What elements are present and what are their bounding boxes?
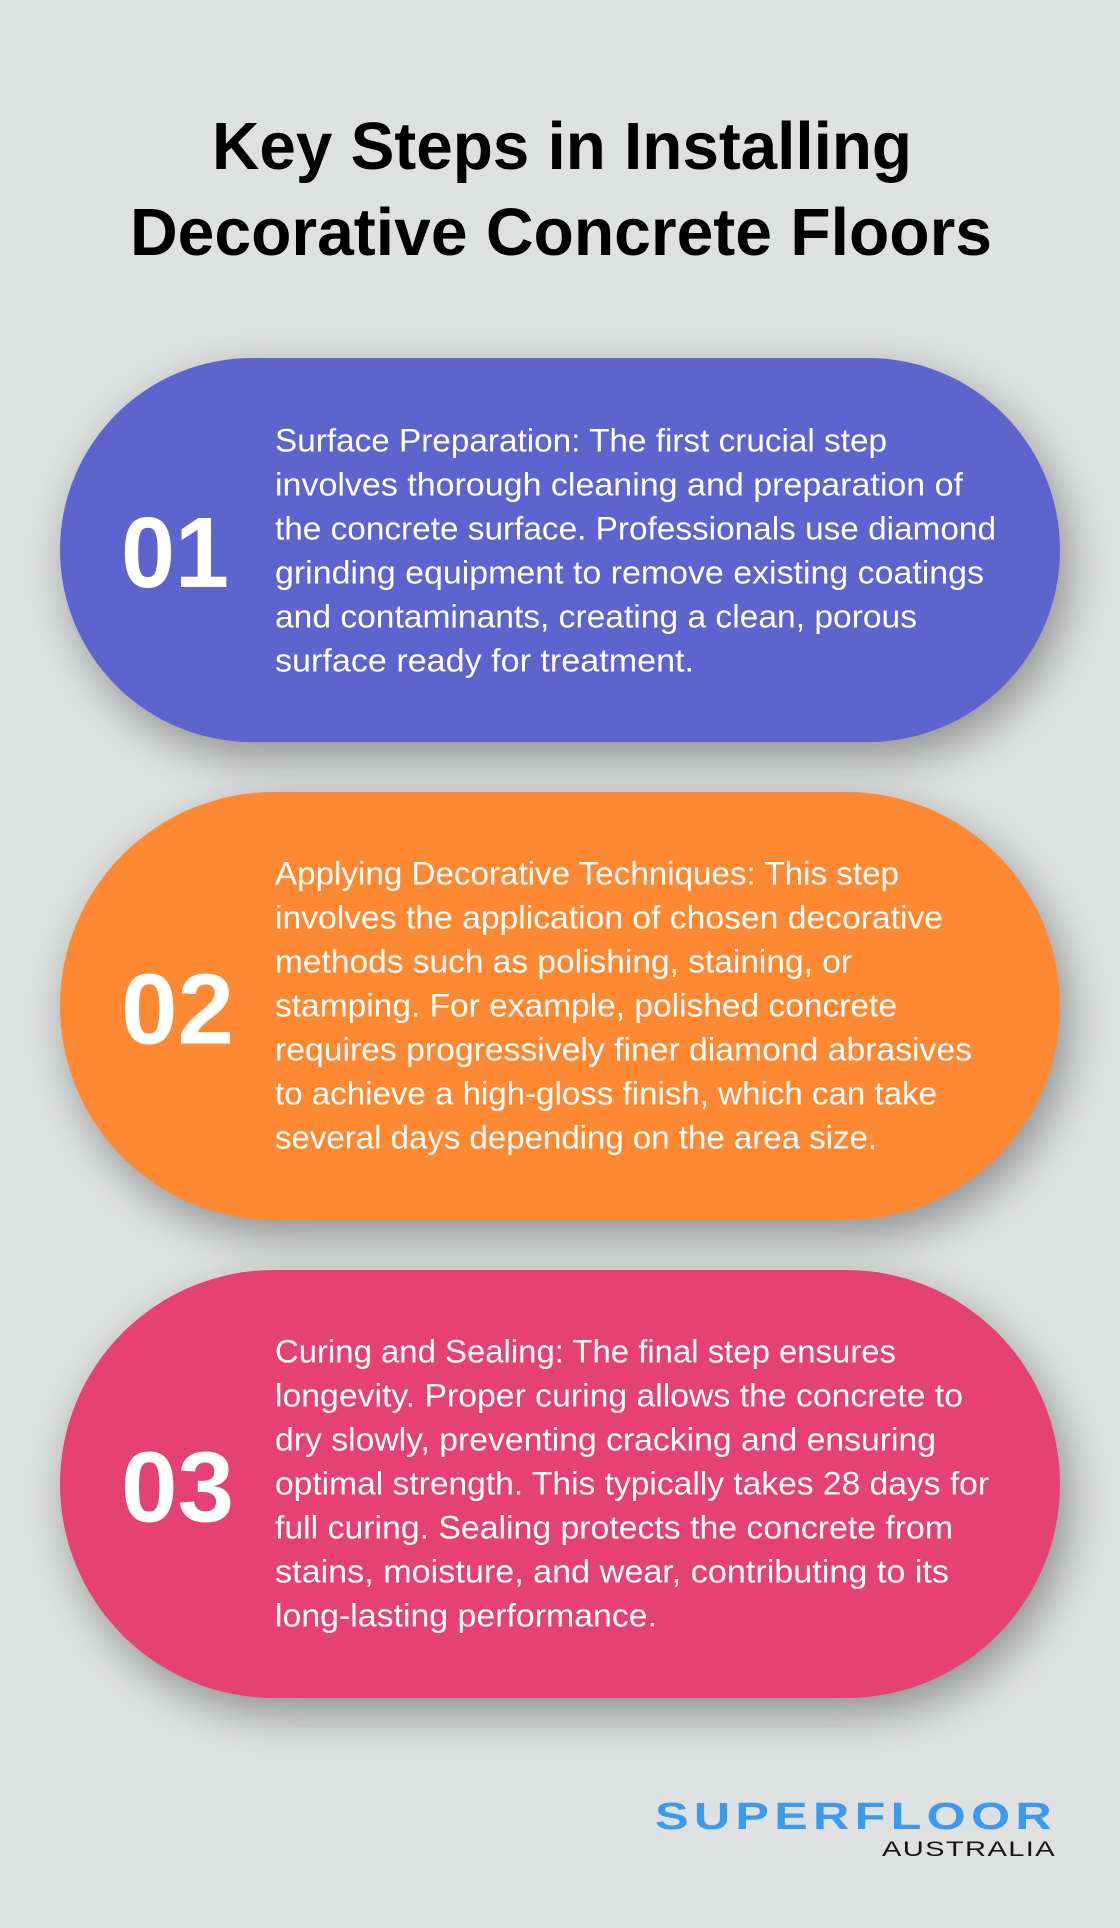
step 01 description: Surface Preparation: The first crucial step [275,422,887,458]
step 01 description: and contaminants, creating a clean, porous [275,598,917,634]
step 02 description: methods such as polishing, staining, or [275,944,852,980]
pill background purple [60,358,1060,742]
step 02 description: Applying Decorative Techniques: This step [275,856,899,892]
logo: Superfloor Australia [655,1796,1057,1861]
step 03 description: stains, moisture, and wear, contributing to its [275,1554,949,1590]
pill background orange [60,792,1060,1220]
step 01 description [275,422,996,678]
step 02 description [275,856,972,1156]
step 03 description: dry slowly, preventing cracking and ensuring [275,1422,936,1458]
step 03 description: Curing and Sealing: The final step ensures [275,1334,896,1370]
step 03 description: long-lasting performance. [275,1598,657,1634]
step 03 description: optimal strength. This typically takes 28 days for [275,1466,989,1502]
step number 02: 02 [121,954,234,1066]
step 02 description: to achieve a high-gloss finish, which can take [275,1076,937,1112]
title: Key Steps in Installing [212,109,912,184]
step 01 description: involves thorough cleaning and preparation of [275,466,963,502]
step 01 description: surface ready for treatment. [275,642,694,678]
logo: Superfloor Australia: SUPERFLOOR [655,1796,1057,1838]
step 03 description: full curing. Sealing protects the concrete from [275,1510,953,1546]
title: Decorative Concrete Floors [130,195,992,270]
logo: Superfloor Australia: AUSTRALIA [882,1838,1056,1861]
panel: step 01 surface preparation [60,358,1060,742]
step number 01: 01 [121,497,229,609]
panel: step 02 applying decorative techniques [60,792,1060,1220]
step 02 description: involves the application of chosen decorative [275,900,943,936]
step 02 description: stamping. For example, polished concrete [275,988,897,1024]
step 01 description: grinding equipment to remove existing coatings [275,554,984,590]
step 03 description [275,1334,989,1634]
pill background pink [60,1270,1060,1698]
step 03 description: longevity. Proper curing allows the concrete to [275,1378,963,1414]
panel: step 03 curing and sealing [60,1270,1060,1698]
title [130,109,992,270]
step 02 description: several days depending on the area size. [275,1120,877,1156]
step 01 description: the concrete surface. Professionals use diamond [275,510,996,546]
step 02 description: requires progressively finer diamond abrasives [275,1032,972,1068]
step number 03: 03 [121,1432,234,1544]
